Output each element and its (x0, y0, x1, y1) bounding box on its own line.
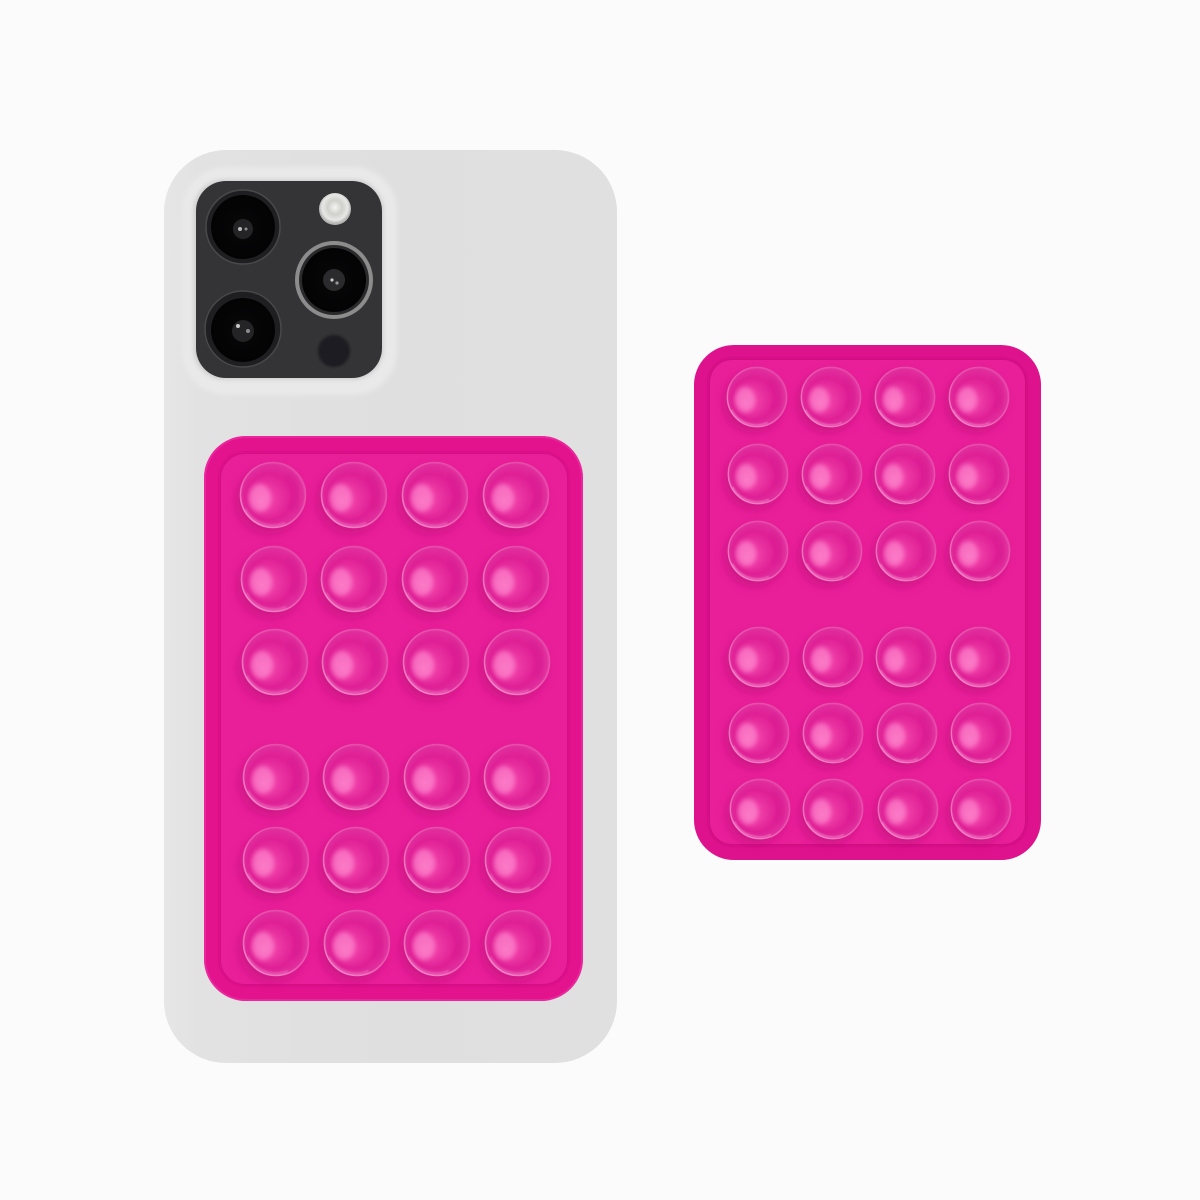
case body (164, 150, 617, 1063)
standalone suction pad (694, 345, 1041, 860)
attached suction pad (204, 436, 583, 1001)
suction cups: attached pad (236, 462, 550, 982)
camera surround (182, 167, 397, 395)
camera module (194, 180, 383, 379)
microphone (318, 335, 350, 367)
suction cups: standalone pad (723, 367, 1011, 845)
flash (319, 193, 351, 225)
lens: top left (206, 190, 280, 264)
phone with case (164, 150, 617, 1063)
lens: bottom left (205, 291, 281, 367)
lens: right (295, 241, 373, 319)
